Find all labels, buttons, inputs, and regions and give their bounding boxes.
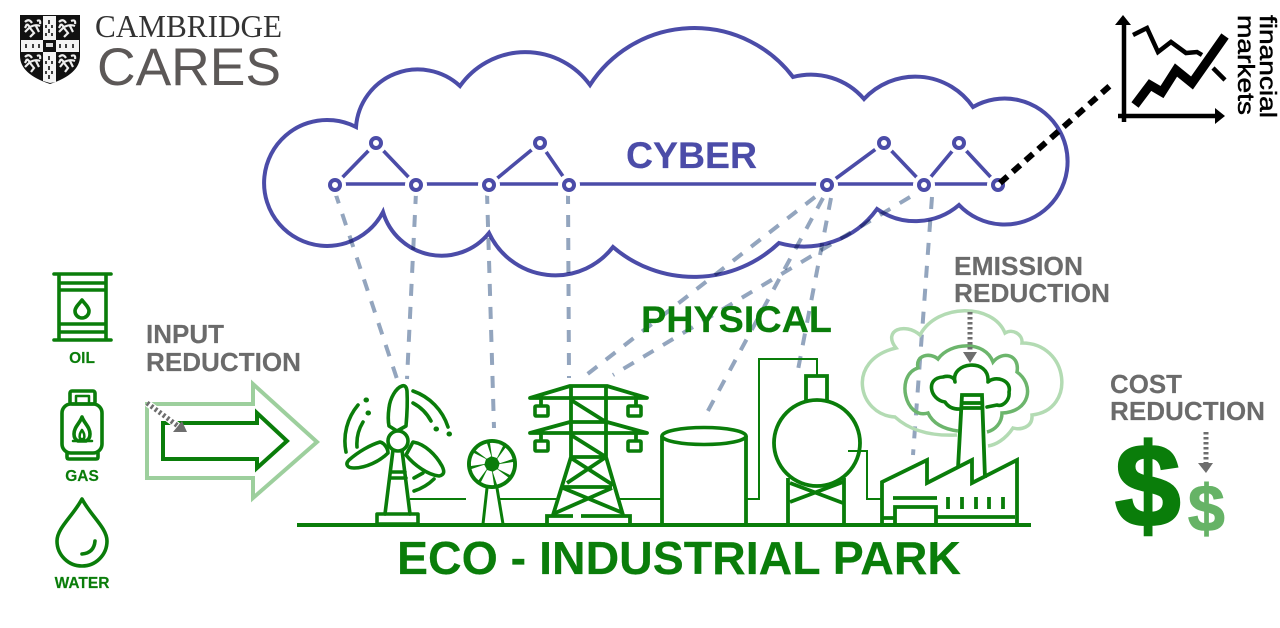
label: financial markets <box>1233 15 1280 118</box>
icon: storage tank <box>662 428 746 524</box>
label: emission reduction: EMISSION <box>954 251 1083 281</box>
icon: oil barrel <box>54 274 111 340</box>
icon: factory <box>882 395 1017 524</box>
arrow: light input flow <box>147 384 317 498</box>
logo text: CARES: CARES <box>97 38 281 97</box>
icon: Cambridge shield <box>20 15 80 84</box>
title: eco-industrial park: ECO - INDUSTRIAL PARK <box>397 532 961 584</box>
arrow: cost reduction pointer <box>1198 432 1213 473</box>
logo: Cambridge CARES <box>20 8 282 97</box>
icon: spherical tank <box>774 376 860 524</box>
ground line <box>297 523 1031 527</box>
heading: CYBER: CYBER <box>626 135 757 176</box>
label: financial markets: markets <box>1233 15 1259 115</box>
cloud: baseline emissions <box>862 311 1062 446</box>
icon: large dollar: $ <box>1115 420 1181 552</box>
dashed links: cyber to physical <box>335 192 932 455</box>
heading: PHYSICAL: PHYSICAL <box>641 299 832 340</box>
connecting pipes <box>410 359 882 499</box>
label: OIL: OIL <box>69 350 95 367</box>
icon: small dollar: $ <box>1188 471 1225 545</box>
label: cost reduction: COST <box>1110 369 1182 399</box>
label: GAS: GAS <box>65 468 99 485</box>
network: cyber nodes and edges <box>324 132 1009 196</box>
chart icon: financial markets <box>1115 15 1225 124</box>
icon: small fan turbine <box>467 439 517 524</box>
logo text: Cambridge: CAMBRIDGE <box>95 8 282 44</box>
arrow: emission reduction pointer <box>963 312 977 363</box>
smoke clouds: emission levels <box>862 311 1062 446</box>
icon: water drop <box>57 499 107 566</box>
icon: wind turbine <box>345 386 450 524</box>
label: input reduction: INPUT <box>146 319 224 349</box>
icon: gas cylinder <box>62 391 102 459</box>
arrow: dashed link to financial markets <box>1000 84 1112 183</box>
cloud: intermediate emissions <box>905 346 1028 432</box>
label: input reduction: REDUCTION <box>146 347 301 377</box>
cloud: reduced emissions <box>931 365 1009 409</box>
icon: transmission tower <box>530 386 647 524</box>
arrow: input reduction pointer <box>147 403 187 432</box>
label: WATER: WATER <box>55 575 109 592</box>
label: emission reduction: REDUCTION <box>954 278 1110 308</box>
cloud: cyber layer outline <box>264 28 1068 277</box>
label: cost reduction: REDUCTION <box>1110 396 1265 426</box>
arrow: reduced input flow <box>163 413 287 468</box>
